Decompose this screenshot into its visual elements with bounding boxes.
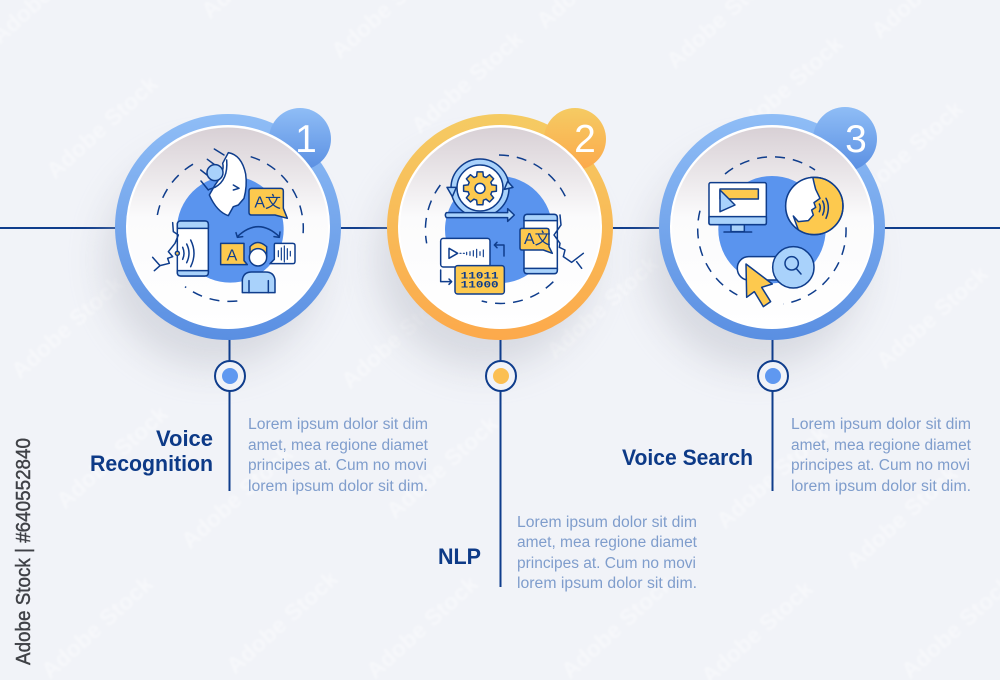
translate bubble [249,188,287,218]
text: Adobe Stock [336,280,458,394]
text block 3: Lorem ipsum dolor sit dim [791,416,971,433]
process arrow [445,209,514,221]
text block 2 [517,514,698,592]
letter and sound bubbles: A [227,248,238,265]
text: Adobe Stock [41,70,163,184]
heading: voice recognition [90,426,213,476]
step 2: NLP [377,108,613,587]
text block 2: amet, mea regione diamet [517,534,698,551]
text block 1: Lorem ipsum dolor sit dim [248,416,428,433]
robot head [201,149,246,216]
phone with translation: A文 [524,230,551,248]
timeline node 2 [486,361,516,391]
text block 2: Lorem ipsum dolor sit dim [517,514,697,531]
text: Adobe Stock [841,460,963,574]
binary card: 11011 [461,270,499,282]
text block 2: principes at. Cum no movi [517,555,696,572]
timeline node 1 [215,361,245,391]
text block 1: principes at. Cum no movi [248,457,427,474]
arrows [236,227,280,237]
step 2 badge [544,108,606,170]
timeline node 3 [758,361,788,391]
icon: voice recognition [153,149,303,301]
icon: voice search [698,157,846,307]
speaking face [780,175,843,235]
text block 1 [248,416,429,495]
text: Adobe Stock [846,95,968,209]
text: Adobe Stock [726,30,848,144]
text: Adobe Stock [541,250,663,364]
text block 1: amet, mea regione diamet [248,437,429,454]
step 3 number: 3 [845,118,867,161]
listener [242,242,275,293]
text block 3: principes at. Cum no movi [791,457,970,474]
translate bubble: A文 [254,193,281,211]
monitor [709,183,766,232]
text block 3: amet, mea regione diamet [791,437,972,454]
step 3: voice search [649,107,885,491]
search pill and cursor [737,247,814,307]
text: Adobe Stock [711,420,833,534]
phone and speaker [153,221,208,276]
binary card: 11000 [461,280,499,292]
step 1 number: 1 [295,118,317,161]
text: Adobe Stock [6,270,128,384]
heading: voice recognition: Voice [156,426,213,451]
side credit: Adobe Stock | #640552840 [13,438,35,665]
heading: voice search: Voice Search [622,445,753,470]
heading: NLP: NLP [438,544,481,569]
text block 3: lorem ipsum dolor sit dim. [791,478,971,495]
horizontal timeline [0,227,1000,229]
text: Adobe Stock [406,25,528,139]
text block 1: lorem ipsum dolor sit dim. [248,478,428,495]
phone with translation [520,214,583,274]
text block 3 [791,416,972,495]
text: Adobe Stock [381,410,503,524]
letter and sound bubbles [221,243,295,265]
rotating gear [447,159,513,217]
text: Adobe Stock [871,260,993,374]
text: Adobe Stock [176,440,298,554]
step 1 badge [269,108,331,170]
step 3 badge [813,107,877,171]
heading: voice recognition: Recognition [90,451,213,476]
audio card [441,238,504,284]
binary card [455,266,504,294]
text: Adobe Stock [221,565,343,679]
step 2 number: 2 [574,118,596,161]
step 1: voice recognition [105,108,341,491]
icon: natural language processing [425,155,583,303]
text: Adobe Stock [51,400,173,514]
text block 2: lorem ipsum dolor sit dim. [517,575,697,592]
